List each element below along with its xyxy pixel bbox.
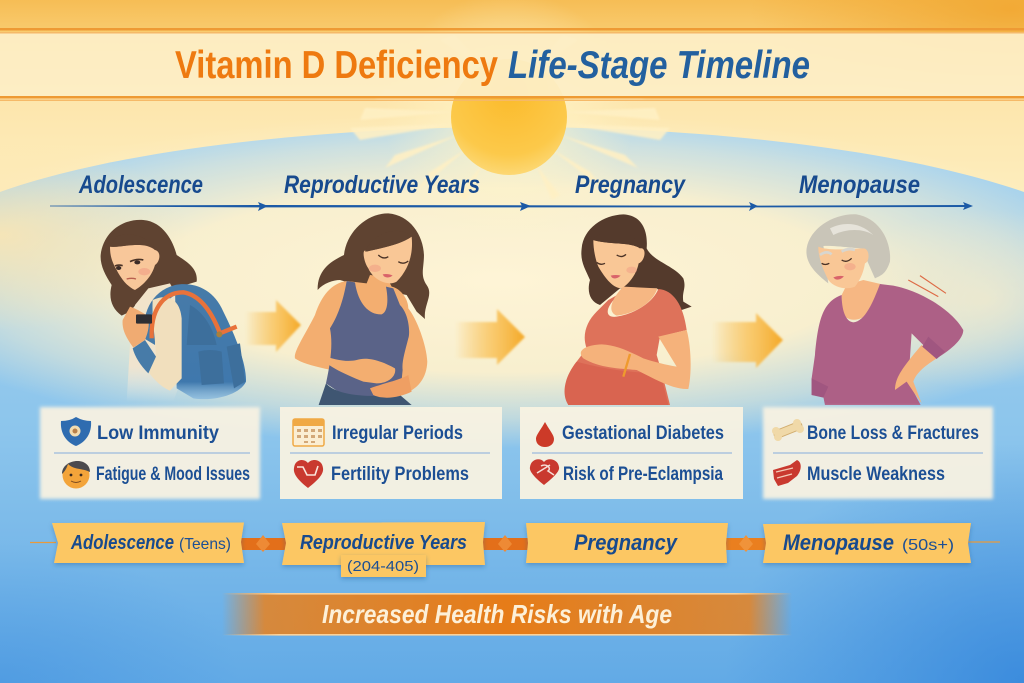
- stage heading: Menopause: Menopause: [799, 171, 920, 199]
- panel: menopause risks: [763, 407, 993, 499]
- icon: blood drop: [536, 422, 554, 447]
- stage heading: Reproductive Years: Reproductive Years: [284, 171, 480, 199]
- title: [175, 44, 810, 87]
- ribbon: reproductive years: Reproductive Years: [300, 532, 467, 554]
- ribbon: menopause: [763, 523, 971, 563]
- icon: tired face: [62, 461, 90, 488]
- age tag: [341, 555, 426, 577]
- banner: increased health risks: Increased Health Risks with Age: [322, 599, 672, 629]
- ribbon: pregnancy: [526, 523, 728, 563]
- text: low immunity: Low Immunity: [97, 423, 219, 444]
- figure: adolescent with backpack: [101, 220, 246, 402]
- ribbon: menopause: Menopause: [783, 530, 894, 555]
- icon: bone: [772, 419, 804, 441]
- figure: woman with abdominal pain: [295, 213, 429, 405]
- text: risk of pre-eclampsia: Risk of Pre-Eclampsia: [563, 464, 723, 485]
- figure: older woman holding back: [806, 214, 963, 405]
- panel: adolescence risks: [40, 407, 260, 499]
- text: fatigue and mood issues: Fatigue & Mood Issues: [96, 464, 250, 485]
- title: Life-Stage Timeline: [508, 44, 810, 87]
- arrow: reproductive to pregnancy: [455, 309, 525, 365]
- sun: [451, 59, 567, 175]
- background: cream haze: [0, 112, 1024, 448]
- timeline arrow line: [50, 202, 973, 211]
- sun glow: [384, 0, 634, 242]
- arrow: pregnancy to menopause: [712, 313, 783, 368]
- text: irregular periods: Irregular Periods: [332, 423, 463, 444]
- ribbon: menopause: (50s+): [902, 537, 954, 554]
- banner: increased health risks: [222, 593, 792, 636]
- figure: pregnant woman: [565, 214, 692, 405]
- ribbon: adolescence: Adolescence: [70, 532, 174, 554]
- arrow: adolescence to reproductive: [245, 300, 301, 352]
- ribbon: adolescence: [52, 522, 244, 563]
- panel: pregnancy risks: [520, 407, 743, 499]
- ribbon: adolescence: (Teens): [179, 536, 231, 553]
- text: muscle weakness: Muscle Weakness: [807, 464, 945, 485]
- text: bone loss and fractures: Bone Loss & Fractures: [807, 423, 979, 444]
- stage heading: Adolescence: Adolescence: [78, 171, 203, 199]
- panel: reproductive risks: [280, 407, 502, 499]
- ribbon connector: [30, 535, 1000, 552]
- icon: heart with ribbon: [530, 459, 559, 485]
- ribbon: reproductive years: [282, 522, 485, 577]
- header band: [0, 28, 1024, 101]
- icon: shield: [61, 417, 91, 446]
- icon: heart with uterus line: [294, 460, 323, 488]
- icon: calendar: [293, 419, 324, 446]
- text: gestational diabetes: Gestational Diabetes: [562, 423, 724, 444]
- ribbon: pregnancy: Pregnancy: [574, 530, 679, 555]
- icon: muscle: [773, 460, 801, 486]
- age tag: (204-405): [347, 558, 419, 575]
- stage heading: Pregnancy: Pregnancy: [575, 171, 686, 199]
- title: Vitamin D Deficiency: [175, 44, 498, 87]
- sun rays: [350, 35, 670, 200]
- text: fertility problems: Fertility Problems: [331, 464, 469, 485]
